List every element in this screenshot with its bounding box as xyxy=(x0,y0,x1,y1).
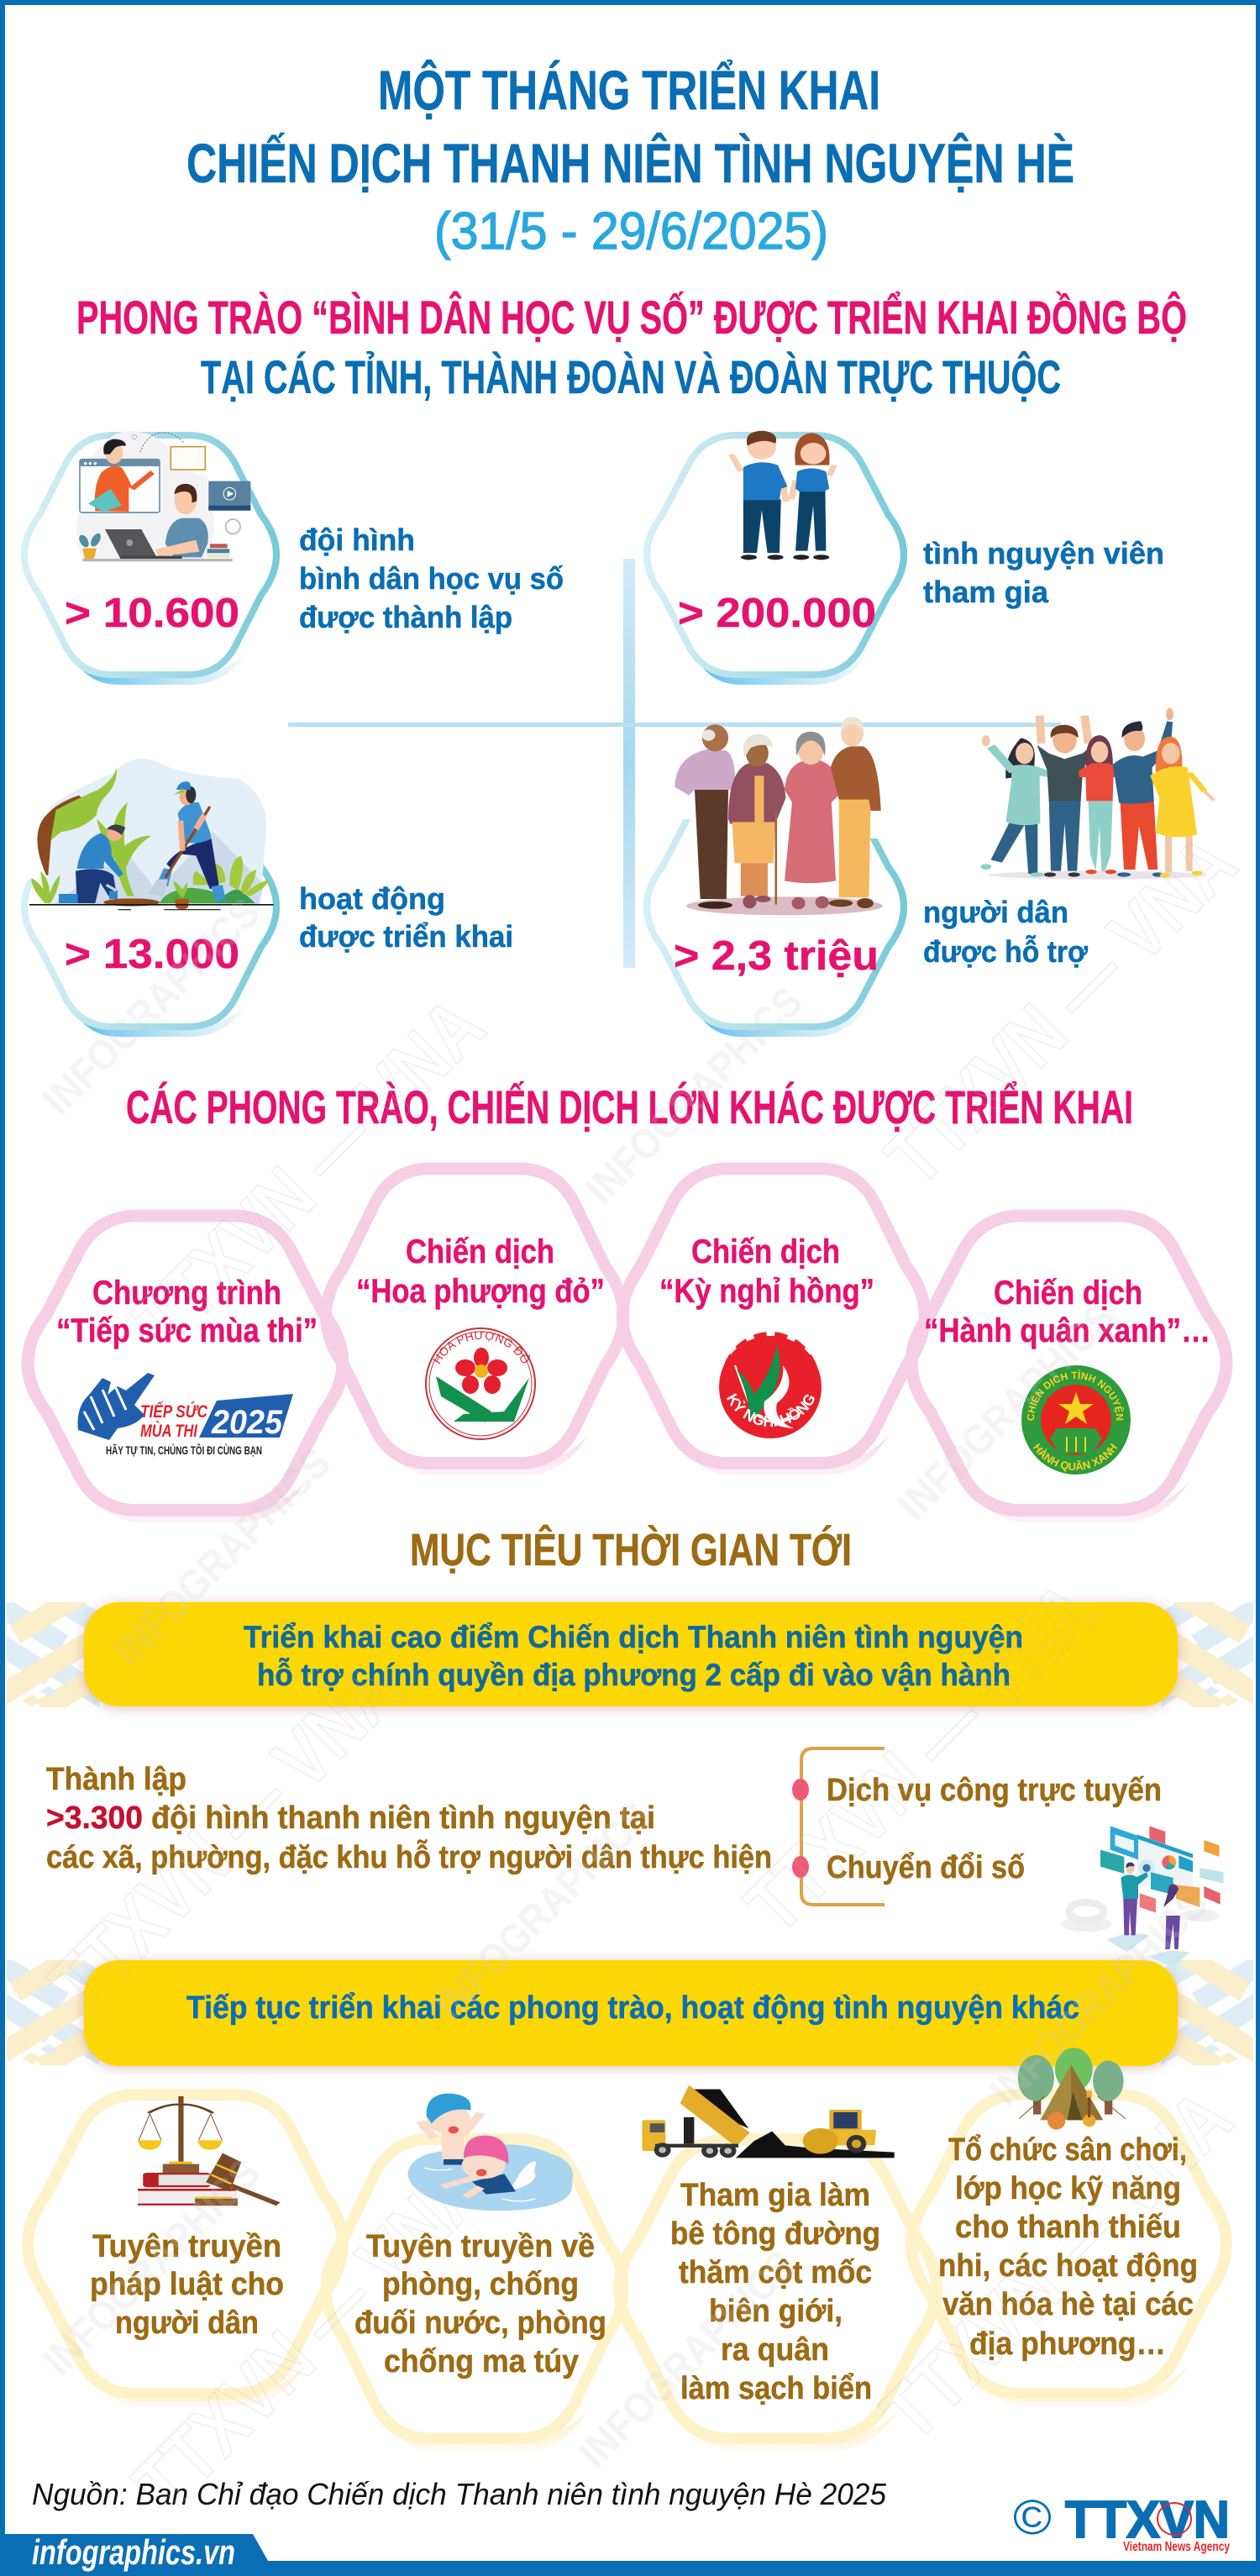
source note: Nguồn: Ban Chỉ đạo Chiến dịch Thanh niên tình nguyện Hè 2025 xyxy=(32,2477,887,2511)
text block: establish teams xyxy=(46,1762,772,1875)
icon: digital transformation xyxy=(1061,1826,1224,1968)
watermarks: INFOGRAPHICS xyxy=(425,1793,660,2028)
label: stat 200.000: tình nguyện viên xyxy=(923,536,1164,570)
value: > 2,3 triệu xyxy=(674,933,879,979)
text: địa phương… xyxy=(969,2326,1166,2362)
text xyxy=(670,2178,880,2406)
label: stat 13.000: hoạt động xyxy=(299,881,445,916)
label: stat 13.000: được triển khai xyxy=(299,919,513,954)
text: làm sạch biển xyxy=(680,2371,872,2406)
text: pháp luật cho xyxy=(90,2267,284,2302)
panel: stat 200.000 xyxy=(647,431,904,685)
text: “Kỳ nghỉ hồng” xyxy=(659,1273,874,1310)
logo: Kỳ nghỉ hồng: KỲ NGHỈ HỒNG xyxy=(727,1393,815,1427)
text: cho thanh thiếu xyxy=(955,2210,1181,2245)
panel: stat 10.600 xyxy=(24,431,276,685)
label: stat 2,3 triệu xyxy=(923,895,1088,969)
label: stat 10.600 xyxy=(299,523,564,634)
logo: TTXVN: © xyxy=(1013,2490,1052,2545)
value: > 13.000 xyxy=(65,932,239,977)
logo: Hoa phượng đỏ xyxy=(425,1327,536,1440)
bracket list: Chuyển đổi số xyxy=(827,1850,1025,1885)
text: Chiến dịch xyxy=(994,1275,1142,1312)
icon: planting trees xyxy=(29,759,274,910)
logo: Hành quân xanh xyxy=(1021,1365,1131,1475)
watermarks: INFOGRAPHICS xyxy=(34,889,269,1124)
watermarks: TTXVN — VNA xyxy=(729,1566,1113,1950)
logo: Kỳ nghỉ hồng xyxy=(719,1332,822,1438)
icon: online learning xyxy=(76,431,250,561)
icon: children swimming xyxy=(407,2094,573,2211)
watermarks: INFOGRAPHICS xyxy=(34,2149,269,2384)
panel: drowning prevention xyxy=(326,2094,623,2451)
logo: Tiếp sức mùa thi 2025 xyxy=(78,1373,293,1457)
text: biên giới, xyxy=(709,2294,843,2329)
text: Triển khai cao điểm Chiến dịch Thanh niên tình nguyện xyxy=(244,1620,1023,1654)
title xyxy=(186,59,1074,194)
logo: Tiếp sức mùa thi 2025: HÃY TỰ TIN, CHÚNG TÔI ĐI CÙNG BẠN xyxy=(106,1443,262,1457)
text: Tổ chức sân chơi, xyxy=(948,2132,1187,2168)
website: infographics.vn xyxy=(32,2532,235,2572)
icon: dump truck and roller xyxy=(642,2085,895,2158)
label: stat 200.000 xyxy=(923,536,1164,609)
text: Chiến dịch xyxy=(691,1233,840,1270)
icon: young people group xyxy=(980,708,1214,880)
logo: Tiếp sức mùa thi 2025: MÙA THI xyxy=(140,1421,198,1441)
label: stat 200.000: tham gia xyxy=(923,575,1049,609)
text: Chiến dịch xyxy=(406,1233,554,1270)
panel: Hành quân xanh xyxy=(906,1210,1233,1522)
logo: Hành quân xanh: HÀNH QUÂN XANH xyxy=(1033,1443,1117,1472)
text: Tham gia làm xyxy=(680,2178,870,2213)
section heading: Bình dân học vụ số xyxy=(76,291,1187,403)
bracket list xyxy=(792,1748,1162,1905)
text xyxy=(938,2132,1198,2362)
watermarks: INFOGRAPHICS xyxy=(104,1439,339,1674)
text: “Tiếp sức mùa thi” xyxy=(56,1312,318,1349)
text block: establish teams: đội hình thanh niên tình nguyện tại xyxy=(151,1801,655,1836)
text block: establish teams: >3.300 xyxy=(46,1801,143,1836)
watermarks: INFOGRAPHICS xyxy=(981,1880,1216,2116)
bracket list: Dịch vụ công trực tuyến xyxy=(827,1773,1162,1808)
text: “Hoa phượng đỏ” xyxy=(356,1273,605,1310)
text: nhi, các hoạt động xyxy=(938,2248,1198,2284)
panel: Tiếp sức mùa thi xyxy=(28,1216,343,1522)
text: văn hóa hè tại các xyxy=(942,2287,1194,2322)
date range: (31/5 - 29/6/2025) xyxy=(434,202,828,260)
section heading: next goals: MỤC TIÊU THỜI GIAN TỚI xyxy=(410,1524,852,1575)
panel: youth playgrounds xyxy=(911,2048,1226,2406)
text: ra quân xyxy=(721,2332,829,2368)
text: Chương trình xyxy=(92,1275,281,1312)
text: đuối nước, phòng xyxy=(354,2305,606,2341)
text: lớp học kỹ năng xyxy=(955,2171,1181,2206)
cross divider xyxy=(288,559,1061,968)
watermarks xyxy=(34,818,1253,2529)
panel: legal outreach xyxy=(28,2095,343,2406)
label: stat 2,3 triệu: người dân xyxy=(923,895,1068,929)
text: Tiếp tục triển khai các phong trào, hoạt động tình nguyện khác xyxy=(186,1990,1079,2026)
label: stat 10.600: bình dân học vụ số xyxy=(299,561,564,596)
text: bê tông đường xyxy=(670,2216,880,2252)
text xyxy=(659,1233,874,1310)
text: “Hành quân xanh”… xyxy=(924,1312,1210,1349)
text: chống ma túy xyxy=(384,2344,579,2379)
callout: peak campaign xyxy=(84,1602,1178,1706)
panel: Kỳ nghỉ hồng xyxy=(617,1163,930,1475)
icon: scales of justice xyxy=(138,2096,278,2205)
text: Tuyên truyền xyxy=(92,2229,281,2264)
logo: Hành quân xanh: CHIẾN DỊCH TÌNH NGUYỆN xyxy=(1026,1369,1124,1421)
icon: tent and trees xyxy=(1018,2048,1126,2130)
text xyxy=(924,1275,1210,1349)
text xyxy=(56,1275,318,1349)
value: > 200.000 xyxy=(678,591,876,636)
panel: stat 2,3 triệu xyxy=(647,708,1214,1037)
text: hỗ trợ chính quyền địa phương 2 cấp đi vào vận hành xyxy=(257,1658,1011,1692)
icon: two volunteers xyxy=(732,431,834,560)
value: > 10.600 xyxy=(65,591,239,636)
watermarks: INFOGRAPHICS xyxy=(570,2242,805,2477)
panel: Hoa phượng đỏ xyxy=(320,1163,629,1475)
text: người dân xyxy=(115,2305,259,2341)
watermarks: TTXVN — VNA xyxy=(118,981,501,1365)
logo: Tiếp sức mùa thi 2025: 2025 xyxy=(211,1404,283,1441)
watermarks: INFOGRAPHICS xyxy=(889,1294,1124,1529)
panel: road and beach work xyxy=(619,2085,937,2451)
callout: continue activities xyxy=(84,1960,1178,2066)
label: stat 10.600: được thành lập xyxy=(299,600,512,634)
footer band xyxy=(0,2532,1260,2576)
text block: establish teams: các xã, phường, đặc khu hỗ trợ người dân thực hiện xyxy=(46,1838,772,1875)
label: stat 10.600: đội hình xyxy=(299,523,415,557)
text xyxy=(244,1620,1023,1692)
panel: stat 13.000 xyxy=(24,759,276,1037)
label: stat 2,3 triệu: được hỗ trợ xyxy=(923,934,1088,969)
text xyxy=(354,2229,606,2379)
logo: TTXVN xyxy=(1013,2490,1230,2554)
label: stat 13.000 xyxy=(299,881,513,954)
text xyxy=(90,2229,284,2341)
logo: Tiếp sức mùa thi 2025: TIẾP SỨC xyxy=(140,1401,208,1422)
watermarks: INFOGRAPHICS xyxy=(576,978,811,1213)
watermarks: TTXVN — VNA xyxy=(34,1645,417,2029)
decorative bands behind yellow pills xyxy=(0,1590,1260,2068)
text block: establish teams: Thành lập xyxy=(46,1762,186,1797)
text xyxy=(356,1233,605,1310)
watermarks: TTXVN — VNA xyxy=(118,2145,501,2529)
text: thăm cột mốc xyxy=(679,2255,872,2290)
title: MỘT THÁNG TRIỂN KHAI xyxy=(378,59,880,121)
logo: Hoa phượng đỏ: HOA PHƯỢNG ĐỎ xyxy=(433,1331,531,1364)
text: Tuyên truyền về xyxy=(366,2229,595,2264)
logo: TTXVN: TTXVN xyxy=(1065,2491,1230,2549)
icon: elderly people xyxy=(675,717,883,915)
text: phòng, chống xyxy=(382,2267,579,2302)
